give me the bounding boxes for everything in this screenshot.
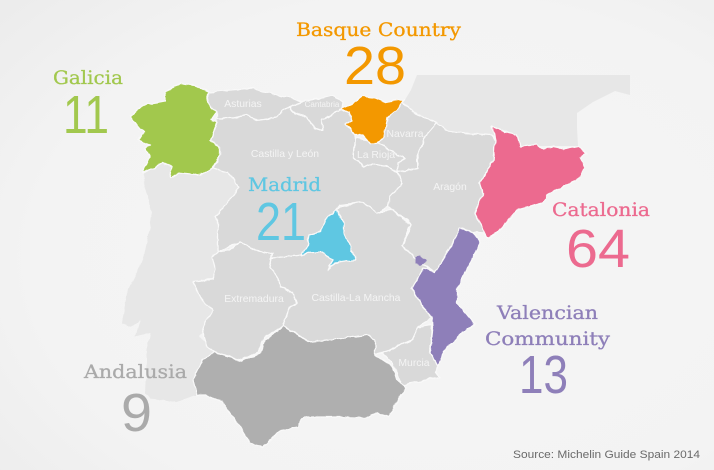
callout: Madrid bbox=[248, 174, 321, 252]
label: Castilla-La Mancha: Castilla-La Mancha bbox=[312, 293, 401, 304]
region: Portugal bbox=[122, 163, 240, 402]
region: Cantabria bbox=[290, 95, 343, 130]
region: Madrid bbox=[301, 209, 356, 270]
label: Asturias: Asturias bbox=[224, 99, 262, 110]
region: Valencian Community bbox=[412, 228, 480, 365]
label: Navarra: Navarra bbox=[387, 129, 424, 140]
region: Andalusia bbox=[193, 326, 406, 448]
region: Castilla y León bbox=[210, 107, 402, 260]
callout: Basque Country bbox=[296, 19, 461, 96]
label: Murcia: Murcia bbox=[398, 358, 430, 369]
callout: Catalonia: 64 bbox=[566, 219, 630, 279]
region: Catalonia bbox=[475, 126, 587, 238]
region: Aragón bbox=[388, 123, 495, 272]
callout: Galicia bbox=[53, 67, 123, 145]
label: Cantabria: Cantabria bbox=[305, 100, 340, 109]
callout: Galicia: 11 bbox=[63, 85, 109, 145]
callout: Catalonia bbox=[552, 199, 650, 279]
label: Extremadura: Extremadura bbox=[224, 294, 284, 305]
label: Castilla y León: Castilla y León bbox=[251, 149, 319, 160]
callout: Madrid: Madrid bbox=[248, 174, 321, 196]
region: La Rioja bbox=[353, 138, 405, 172]
source note: Source: Michelin Guide Spain 2014 bbox=[513, 449, 700, 461]
region: Galicia bbox=[130, 83, 220, 177]
region: Basque Country bbox=[340, 96, 405, 144]
region: Navarra bbox=[378, 102, 437, 172]
map of Spain bbox=[122, 75, 630, 448]
region: Asturias bbox=[207, 88, 302, 120]
region: Castilla-La Mancha bbox=[270, 202, 432, 353]
Iberian regions bbox=[122, 83, 587, 448]
callout: Catalonia: Catalonia bbox=[552, 199, 650, 221]
region: Murcia bbox=[383, 325, 440, 385]
callout: Valencian Community bbox=[485, 302, 610, 405]
label: Aragón: Aragón bbox=[433, 182, 467, 193]
region labels bbox=[224, 99, 467, 369]
callout: Andalusia bbox=[83, 361, 187, 443]
callout: Valencian Community: Community bbox=[485, 328, 610, 350]
label: La Rioja: La Rioja bbox=[357, 150, 395, 161]
callout: Andalusia: Andalusia bbox=[83, 361, 187, 383]
callout: Madrid: 21 bbox=[256, 192, 306, 252]
callout: Galicia: Galicia bbox=[53, 67, 123, 89]
callout: Andalusia: 9 bbox=[121, 383, 152, 443]
region: Extremadura bbox=[193, 242, 297, 360]
callout: Valencian Community: 13 bbox=[519, 345, 568, 405]
callout: Basque Country: Basque Country bbox=[296, 19, 461, 41]
callout: Basque Country: 28 bbox=[344, 36, 406, 96]
callout: Valencian Community: Valencian bbox=[496, 302, 598, 324]
region: France bbox=[403, 75, 630, 146]
region: Valencian enclave bbox=[415, 256, 427, 265]
